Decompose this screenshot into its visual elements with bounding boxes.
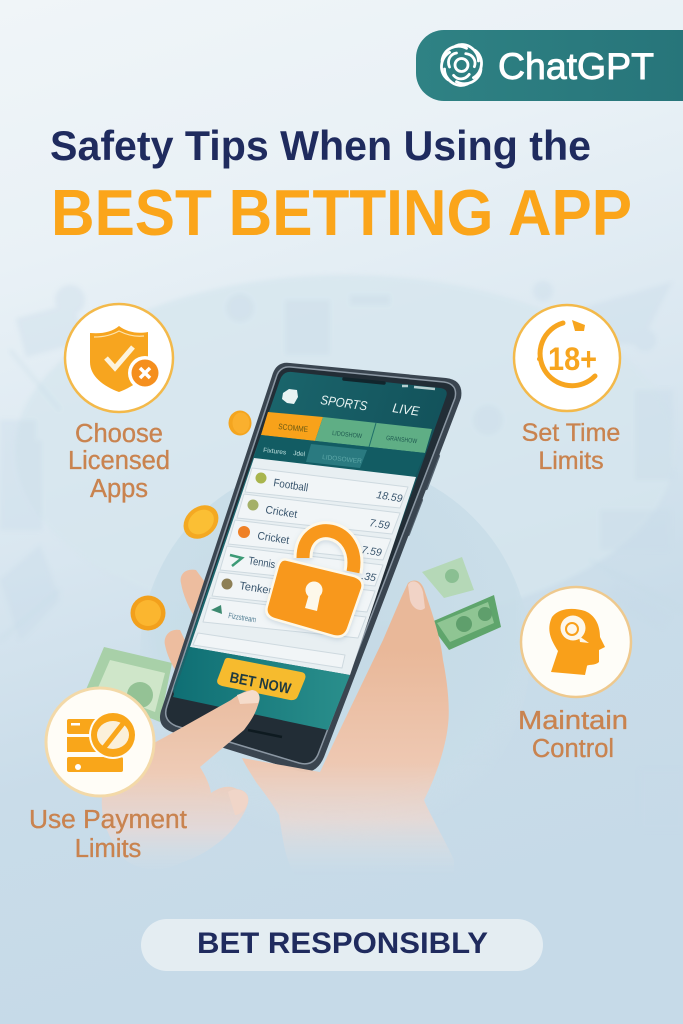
row labels [228,477,309,624]
row labels: Football [273,477,309,494]
panel: choose licensed apps [65,304,173,503]
icon: shield [90,326,162,392]
padlock [268,531,361,635]
panel: maintain control [518,587,631,763]
icon circle [521,587,631,697]
label: Choose [75,420,163,448]
background faint illustration [0,275,683,830]
match list panel [190,458,416,675]
row odds: 7.59 [369,517,391,532]
green tabs [315,417,432,453]
badge wordmark: ChatGPT [498,46,654,87]
tab LIVE: LIVE [392,400,421,419]
phone side buttons [408,456,438,534]
thumbnail [408,581,425,610]
icon circle [46,688,154,796]
row labels: Tennis [248,555,276,571]
label [29,806,187,863]
row icons [211,472,266,614]
title line 2: BEST BETTING APP [51,176,632,249]
row labels: Cricket [257,530,290,547]
title line 1: Safety Tips When Using the [50,122,591,169]
coin 2 [177,498,225,546]
label: Limits [538,447,604,475]
icon: ChatGPT logo [435,40,488,90]
panel: set time limits [514,305,620,475]
match rows [193,468,408,668]
filter strip: Fixtures [263,447,287,456]
label: Limits [75,835,141,863]
coins [130,410,252,630]
row odds: 7.59 [361,544,383,559]
bet now button: BET NOW [228,669,293,698]
top speaker [344,379,384,383]
label: Use Payment [29,806,187,834]
ChatGPT badge [416,30,683,101]
icon circle [65,304,173,412]
status icons [402,386,435,389]
filter strip: LIDOSOWER [322,454,362,465]
bet now button [217,658,306,700]
label [68,420,170,503]
phone [160,363,461,772]
green tabs: LIDOSHOW [332,430,363,440]
right hand [242,580,454,875]
row odds [361,489,404,584]
row labels: Fizzstream [228,611,257,624]
label: Set Time [522,419,620,447]
tab SPORTS: SPORTS [320,392,369,414]
bottom teal band [173,647,350,730]
icon circle [514,305,620,411]
phone bezel [166,367,456,764]
fingernail [228,790,248,815]
label [518,707,628,763]
label: Licensed [68,447,170,475]
filter strip [254,435,425,477]
panel: use payment limits [29,688,187,863]
app logo [282,389,298,404]
green tabs: GRANSHOW [386,435,418,445]
phone screen [173,372,447,730]
filter strip: Jdel [293,450,306,458]
title [50,122,632,249]
shackle [303,531,354,572]
keyhole [305,582,322,611]
lock body [268,561,361,635]
footer text: BET RESPONSIBLY [197,927,488,960]
coin 1 [228,410,252,436]
orange tab [261,412,323,441]
left hand [102,690,260,870]
home bar [248,730,282,737]
backdrop disc behind phone [140,460,530,850]
label: Control [532,735,614,763]
orange tab: SCOMME [278,422,309,434]
row odds: .35 [361,570,377,584]
thumbnail [237,690,259,704]
coin 3 [130,596,166,630]
row odds: 18.59 [376,489,404,505]
row labels: Tenker [239,580,273,597]
row labels: Cricket [265,504,298,521]
label: Apps [90,475,148,503]
icon: payment server [67,711,137,772]
money left [85,647,172,722]
money right [422,557,501,650]
icon: clock 18+: 18+ [548,341,597,377]
left-hand fingers behind phone [165,570,213,673]
icon: clock 18+ [537,320,597,386]
label: Maintain [518,707,628,735]
footer pill [141,919,543,971]
icon: head [549,609,605,675]
label [522,419,620,475]
phone body [160,363,461,772]
